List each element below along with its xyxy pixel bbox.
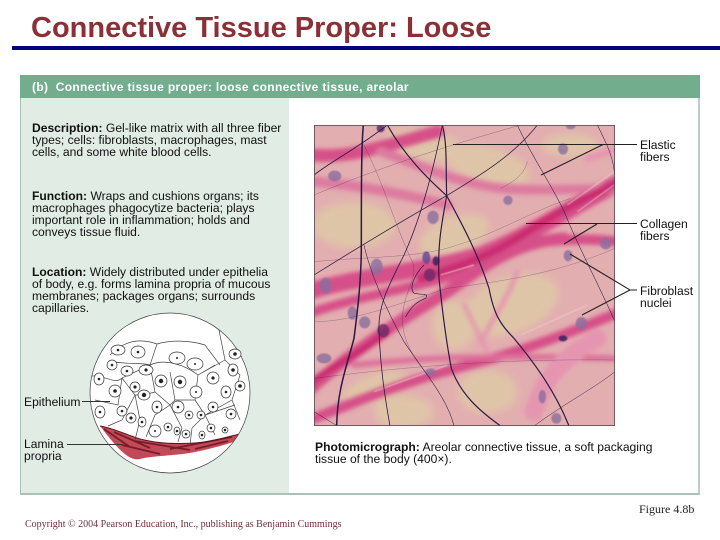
leader: collagen fibers bbox=[526, 224, 637, 244]
text: description bbox=[32, 121, 282, 159]
label: fibroblast nuclei: nuclei bbox=[640, 296, 672, 310]
label: elastic fibers: fibers bbox=[640, 150, 670, 164]
label: lamina propria bbox=[24, 437, 64, 463]
text: function: conveys tissue fluid. bbox=[32, 225, 140, 239]
text: location bbox=[32, 265, 270, 315]
text: function: Function: Wraps and cushions organs; its bbox=[32, 189, 259, 203]
elastic fibers bbox=[314, 125, 615, 426]
photomicrograph caption bbox=[315, 440, 652, 466]
leader line: epithelium bbox=[82, 401, 110, 402]
text: location: Location: Widely distributed under epithelia bbox=[32, 265, 268, 279]
panel: left text column background bbox=[21, 98, 289, 493]
text: location: capillaries. bbox=[32, 301, 89, 315]
label: lamina propria: propria bbox=[24, 449, 62, 463]
label: fibroblast nuclei bbox=[640, 284, 694, 310]
label: collagen fibers bbox=[640, 217, 688, 243]
label: elastic fibers bbox=[640, 138, 676, 164]
copyright: Copyright © 2004 Pearson Education, Inc., publishing as Benjamin Cummings bbox=[25, 519, 341, 530]
photomicrograph bbox=[314, 125, 615, 426]
pale background patches bbox=[312, 123, 599, 428]
epithelial cell borders bbox=[92, 330, 240, 445]
pale highlights within collagen bbox=[374, 172, 614, 392]
photomicrograph caption: Photomicrograph: Areolar connective tissue, a soft packaging bbox=[315, 440, 652, 454]
collagen fiber bands bbox=[307, 132, 621, 418]
title: Connective Tissue Proper: Loose bbox=[31, 12, 491, 44]
label: fibroblast nuclei: Fibroblast bbox=[640, 284, 693, 298]
photomicrograph caption: tissue of the body (400×). bbox=[315, 452, 452, 466]
label: lamina propria: Lamina bbox=[24, 437, 64, 451]
text: location: membranes; packages organs; surrounds bbox=[32, 289, 255, 303]
text: function: important role in inflammation; holds and bbox=[32, 213, 250, 227]
photo border bbox=[314, 125, 615, 426]
label: collagen fibers: fibers bbox=[640, 229, 670, 243]
label: epithelium: Epithelium bbox=[24, 395, 80, 409]
panel: tissue card bbox=[20, 75, 700, 495]
label: collagen fibers: Collagen bbox=[640, 217, 688, 231]
label: elastic fibers: Elastic bbox=[640, 138, 676, 152]
panel header: (b) Connective tissue proper: loose connective tissue, areolar bbox=[32, 80, 409, 94]
text: function: macrophages phagocytize bacteria; plays bbox=[32, 201, 255, 215]
leader: elastic fibers bbox=[453, 144, 637, 175]
panel header bbox=[20, 75, 700, 98]
title underline bbox=[12, 46, 720, 50]
text: description: cells, and some white blood cells. bbox=[32, 145, 211, 159]
text: location: of body, e.g. forms lamina propria of mucous bbox=[32, 277, 270, 291]
text: description: Description: Gel-like matrix with all three fiber bbox=[32, 121, 281, 135]
leader lines: photo callouts bbox=[453, 144, 637, 316]
text: description: types; cells: fibroblasts, macrophages, mast bbox=[32, 133, 267, 147]
fibroblast nuclei bbox=[317, 124, 611, 424]
leader line: lamina propria bbox=[67, 444, 122, 445]
lamina propria tissue bbox=[100, 426, 240, 459]
diagram: epithelium and lamina propria bbox=[90, 312, 250, 474]
leader: fibroblast nuclei bbox=[570, 254, 637, 315]
figure number: Figure 4.8b bbox=[639, 502, 694, 516]
cell nuclei bbox=[94, 345, 245, 439]
text: function bbox=[32, 189, 259, 239]
